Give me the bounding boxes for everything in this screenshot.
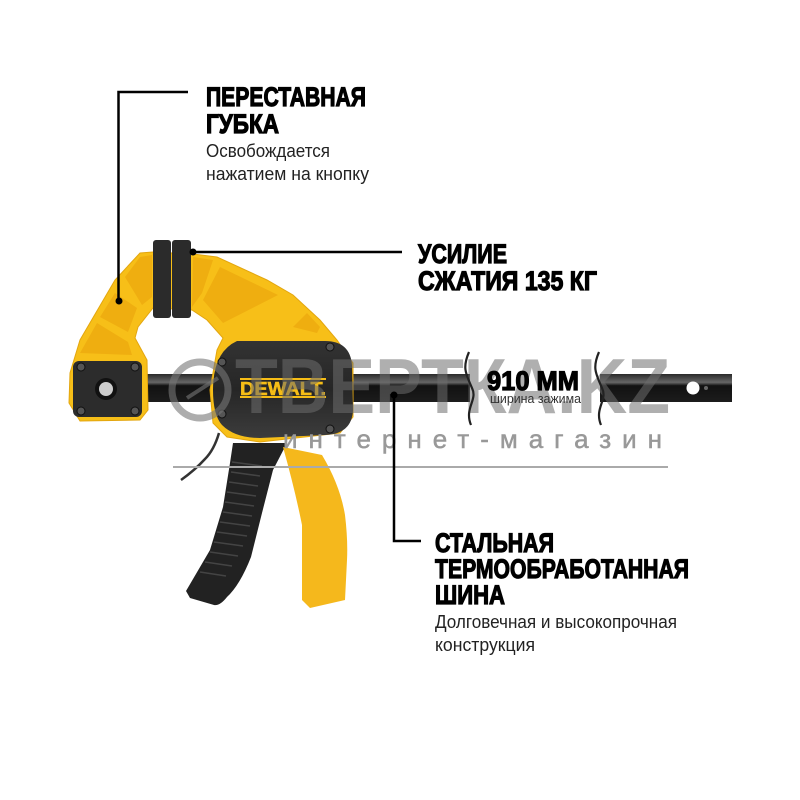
steel bar: [145, 374, 732, 402]
rubber pads: [153, 240, 191, 318]
callout: movable jaw: ГУБКА: [206, 109, 279, 139]
clamp handle: yellow grip: [283, 447, 347, 608]
watermark: ТВЕРТКА.KZ: [235, 342, 670, 430]
break wave left: [465, 352, 474, 425]
watermark: интернет-магазин: [283, 424, 662, 454]
clamping width: ширина зажима: [490, 391, 582, 406]
callout: steel bar: ШИНА: [435, 580, 505, 610]
DeWalt logo: DEWALT.: [240, 379, 326, 399]
callout: movable jaw: Освобождается: [206, 141, 330, 161]
clamping width: 910 ММ: [487, 366, 579, 396]
callout: clamping force: СЖАТИЯ 135 КГ: [418, 266, 597, 296]
leader line 3: [390, 392, 421, 541]
left plate: [73, 361, 142, 417]
leader line 2: [190, 248, 402, 256]
clamp handle: black trigger: [186, 443, 287, 605]
callout: movable jaw: ПЕРЕСТАВНАЯ: [206, 82, 366, 112]
release cord: [181, 433, 219, 480]
main plate: [213, 341, 353, 438]
clamp jaw: [69, 240, 353, 442]
clamping width: [465, 352, 604, 425]
callout: steel bar: Долговечная и высокопрочная: [435, 612, 677, 632]
callout: clamping force: [190, 239, 597, 296]
break wave right: [595, 352, 604, 425]
callout: steel bar: конструкция: [435, 635, 535, 655]
callout: steel bar: ТЕРМООБРАБОТАННАЯ: [435, 554, 689, 584]
callout: steel bar: СТАЛЬНАЯ: [435, 528, 554, 558]
callout: clamping force: УСИЛИЕ: [418, 239, 507, 269]
callout: movable jaw: нажатием на кнопку: [206, 164, 369, 184]
leader line 1: [116, 92, 188, 304]
callout: steel bar: [390, 392, 689, 655]
callout: movable jaw: [116, 82, 369, 304]
watermark: [172, 342, 670, 468]
